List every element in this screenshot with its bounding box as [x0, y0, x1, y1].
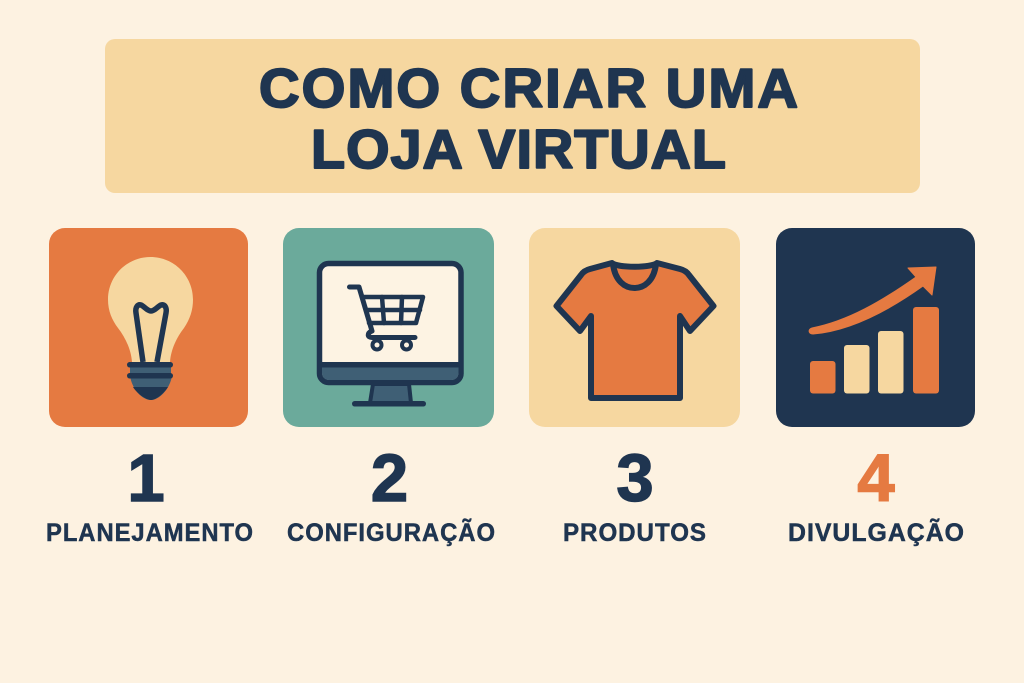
icon: t-shirt	[556, 263, 714, 398]
panel: step 3 produtos	[529, 228, 740, 427]
icon: cart	[350, 287, 423, 350]
panel: step 4 divulgacao	[776, 228, 975, 427]
title banner	[105, 39, 920, 193]
icon: monitor with shopping cart	[320, 264, 461, 406]
step 3 label: PRODUTOS	[563, 519, 707, 547]
icon: t-shirt collar	[613, 264, 656, 288]
step 4 label: DIVULGAÇÃO	[788, 517, 965, 547]
title: COMO CRIAR UMA	[259, 57, 800, 119]
step 3 number: 3	[616, 441, 654, 516]
panel: step 2 configuracao	[283, 228, 494, 427]
step 1 number: 1	[127, 441, 165, 516]
bar chart	[810, 307, 939, 394]
step 2 number: 2	[371, 441, 408, 516]
icon: light bulb	[108, 257, 193, 400]
step 4 number: 4	[857, 441, 895, 516]
arrow	[809, 267, 936, 334]
step 2 label: CONFIGURAÇÃO	[287, 517, 496, 547]
step 1 label: PLANEJAMENTO	[46, 519, 254, 547]
panel: step 1 planejamento	[49, 228, 248, 427]
title	[259, 57, 800, 180]
title: LOJA VIRTUAL	[311, 118, 727, 180]
